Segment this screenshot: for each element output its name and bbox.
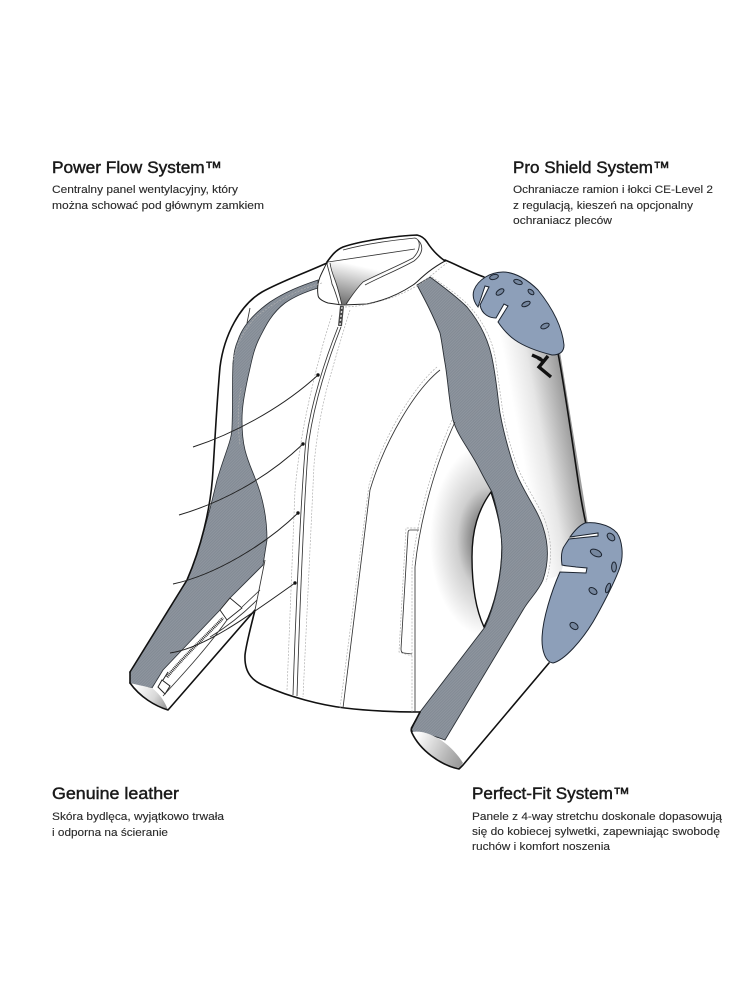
text: Pro Shield System: Ochraniacze ramion i łokci CE-Level 2 (513, 184, 713, 196)
right sleeve shading (488, 325, 588, 580)
text: Pro Shield System: ochraniacz pleców (513, 215, 613, 227)
text: Perfect-Fit System: się do kobiecej sylwetki, zapewniając swobodę (472, 826, 720, 838)
text: Genuine leather (52, 785, 225, 839)
elbow armour (542, 523, 622, 663)
text: Power Flow System (52, 159, 264, 212)
right cuff opening (412, 732, 463, 768)
pointer: line 1 (193, 373, 320, 447)
text: Genuine leather: Genuine leather (52, 785, 180, 803)
front seams and pocket (343, 370, 455, 712)
text: Perfect-Fit System (472, 785, 723, 853)
collar inner gradient (330, 249, 415, 305)
text: Perfect-Fit System: ruchów i komfort noszenia (472, 841, 611, 853)
text: Genuine leather: Skóra bydlęca, wyjątkowo trwała (52, 811, 225, 823)
underarm gap (472, 492, 502, 627)
text: Pro Shield System: Pro Shield System™ (513, 159, 670, 177)
text: Power Flow System: Centralny panel wentylacyjny, który (52, 184, 238, 196)
stitching (232, 283, 350, 697)
shoulder armour (473, 272, 564, 355)
text: Pro Shield System (513, 159, 713, 227)
pointer: line 2 (179, 442, 305, 515)
side body shading (415, 422, 512, 712)
brand logo on sleeve (532, 355, 551, 377)
pointer: line 4 (170, 581, 297, 653)
jacket outline (130, 263, 327, 672)
text: Perfect-Fit System: Perfect-Fit System™ (472, 785, 630, 803)
text: Perfect-Fit System: Panele z 4-way stretchu doskonale dopasowują (472, 811, 723, 823)
text: Pro Shield System: z regulacją, kieszeń na opcjonalny (513, 200, 693, 212)
left cuff opening (130, 683, 168, 710)
left mesh panel (130, 280, 318, 688)
text: Power Flow System: można schować pod głównym zamkiem (52, 200, 264, 212)
centre zipper (293, 306, 342, 696)
collar (318, 235, 447, 307)
text: Genuine leather: i odporna na ścieranie (52, 827, 168, 839)
jacket illustration (130, 235, 622, 769)
collar top edge (327, 235, 445, 262)
pointer: line 3 (173, 511, 300, 584)
text: Power Flow System: Power Flow System™ (52, 159, 222, 177)
sleeve zipper (158, 590, 260, 696)
right mesh panel (411, 277, 548, 740)
